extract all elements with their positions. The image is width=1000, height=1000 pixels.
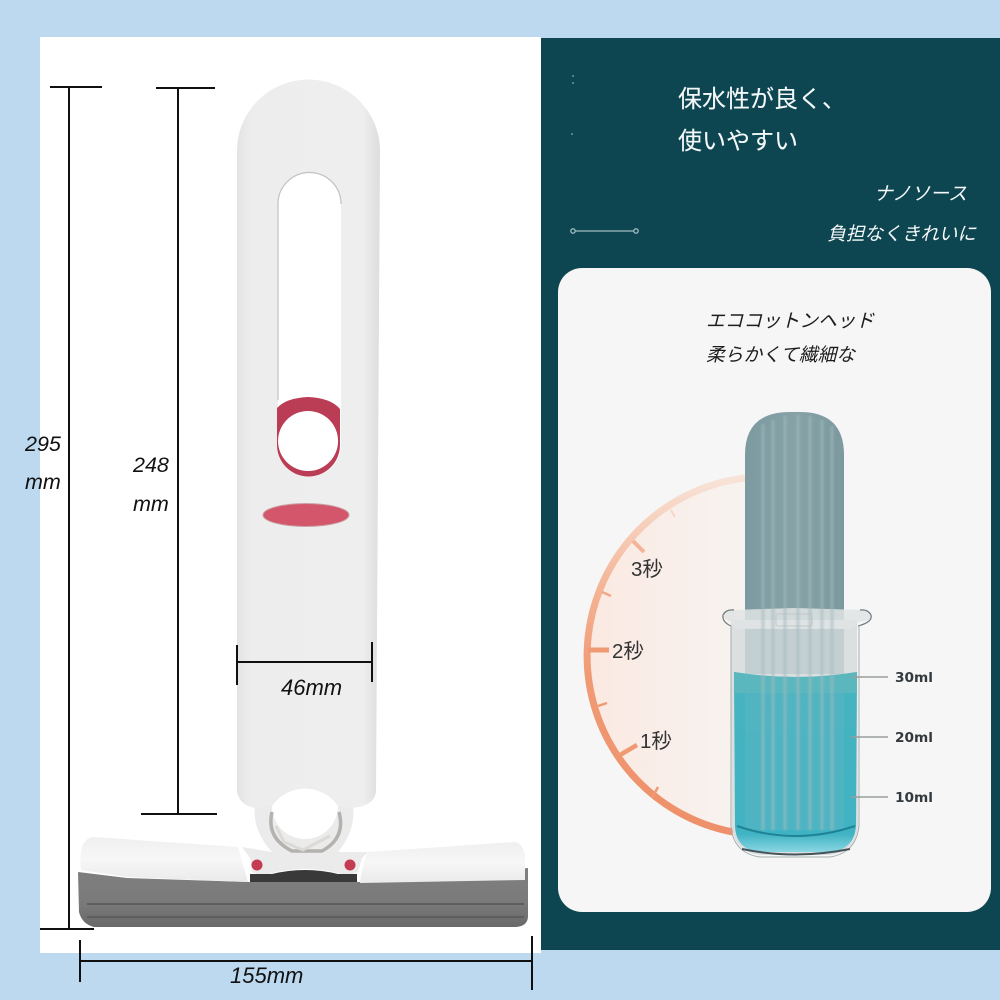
label 46mm: 46mm xyxy=(281,675,342,700)
panel: product dimensions xyxy=(24,37,541,953)
water xyxy=(734,672,857,852)
volume labels xyxy=(851,670,933,806)
subheading: 負担なくきれいに xyxy=(827,223,977,244)
submerged head xyxy=(745,628,844,674)
dial labels: 1秒 xyxy=(640,730,672,753)
water surface band xyxy=(734,672,857,693)
handle slot inner rim xyxy=(278,173,341,400)
beaker with water and cotton head xyxy=(723,412,871,857)
dimension: 155mm xyxy=(80,936,532,990)
volume labels: 20ml xyxy=(895,730,933,746)
beaker bottom glass xyxy=(737,826,855,836)
silver pivot ring xyxy=(271,812,341,851)
dimension: 295mm xyxy=(24,87,102,929)
heading: 保水性が良く、 xyxy=(678,86,846,113)
volume labels: 10ml xyxy=(895,790,933,806)
label 248 mm: mm xyxy=(133,492,169,516)
dial labels: 2秒 xyxy=(612,640,644,663)
red rivet left xyxy=(252,860,262,870)
cotton head xyxy=(745,412,844,640)
submerged head in water xyxy=(745,693,844,830)
subheading: ナノソース xyxy=(874,184,967,205)
heading: 使いやすい xyxy=(678,128,798,155)
rim spout tab xyxy=(776,614,812,626)
red rivet right xyxy=(344,860,356,870)
red oval button xyxy=(263,504,349,526)
volume labels: 30ml xyxy=(895,670,933,686)
head ribs xyxy=(763,415,832,830)
sponge ridges xyxy=(87,904,524,917)
mop product illustration xyxy=(78,80,528,927)
beaker rim xyxy=(723,608,871,629)
dial labels: 3秒 xyxy=(631,558,663,581)
label 155mm: 155mm xyxy=(230,963,303,988)
card: absorption demo xyxy=(558,268,991,912)
dimension: 248mm xyxy=(132,88,217,814)
right roller cover xyxy=(360,842,525,883)
card heading: エココットンヘッド xyxy=(706,310,875,331)
dimension: 46mm xyxy=(237,642,372,700)
label 295 mm: 295 xyxy=(24,432,62,456)
label 295 mm: mm xyxy=(25,470,61,494)
timer dial xyxy=(587,478,745,832)
small specks xyxy=(571,75,574,135)
red ring in handle slot xyxy=(277,397,340,476)
dial ticks xyxy=(588,510,675,798)
pivot bracket xyxy=(242,806,368,876)
left roller cover xyxy=(80,837,248,882)
card heading: 柔らかくて繊細な xyxy=(706,344,856,365)
mop handle xyxy=(237,80,380,808)
beaker outline xyxy=(731,625,859,857)
mop head slot xyxy=(250,870,357,882)
panel: water absorption xyxy=(541,38,1000,950)
mop head sponge xyxy=(78,868,528,927)
label 248 mm: 248 xyxy=(132,453,169,477)
beaker body glass xyxy=(731,620,858,855)
decorative connector icon xyxy=(571,229,638,233)
